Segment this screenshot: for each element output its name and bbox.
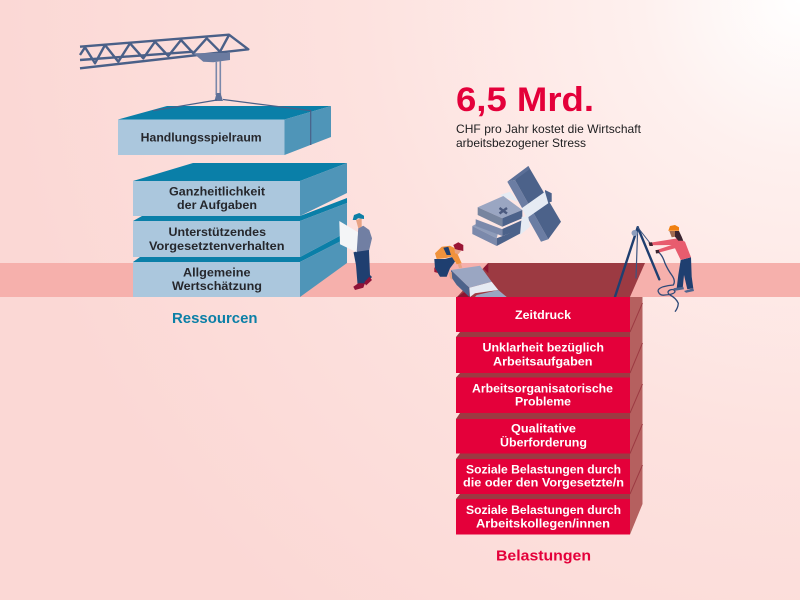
crane xyxy=(80,35,248,101)
block: Handlungsspielraum xyxy=(118,100,331,155)
row: Arbeitsorganisatorische Probleme: Probleme xyxy=(515,395,571,409)
block: Ganzheitlichkeit der Aufgaben: Ganzheitlichkeit xyxy=(169,185,265,199)
row: Unklarheit xyxy=(456,337,630,373)
ground band xyxy=(0,263,800,297)
row: Qualitative Ueberforderung: Überforderung xyxy=(500,436,587,450)
slab being lowered into pit xyxy=(451,266,507,297)
row: Soziale Belastungen Vorgesetzte: die oder den Vorgesetzte/n xyxy=(463,476,624,490)
block: Unterstuetzendes Vorgesetztenverhalten xyxy=(133,198,347,257)
block: Handlungsspielraum: Handlungsspielraum xyxy=(141,131,262,145)
surveyor worker xyxy=(648,225,694,293)
row: Zeitdruck: Zeitdruck xyxy=(515,308,571,322)
block: Allgemeine Wertschaetzung: Wertschätzung xyxy=(172,279,262,293)
subheading: arbeitsbezogener Stress xyxy=(456,136,586,150)
block: Unterstuetzendes Vorgesetztenverhalten: Unterstützendes xyxy=(168,225,266,239)
row: Soziale Belastungen Vorgesetzte xyxy=(456,459,630,494)
block: Unterstuetzendes Vorgesetztenverhalten: Vorgesetztenverhalten xyxy=(149,239,284,253)
block: Allgemeine Wertschaetzung xyxy=(133,232,347,297)
subheading: CHF pro Jahr kostet die Wirtschaft xyxy=(456,122,642,136)
crane trolley xyxy=(193,53,230,62)
block: Ganzheitlichkeit der Aufgaben: der Aufgaben xyxy=(177,198,257,212)
headline number: 6,5 Mrd. xyxy=(456,81,594,119)
row: Soziale Belastungen Arbeitskollegen: Soziale Belastungen durch xyxy=(466,503,621,517)
row: Arbeitsorganisatorische Probleme: Arbeitsorganisatorische xyxy=(472,382,613,396)
row: Qualitative Ueberforderung xyxy=(456,419,630,454)
side face xyxy=(630,297,642,534)
worker with plan xyxy=(339,213,372,290)
tripod xyxy=(615,227,659,297)
row: Unklarheit: Arbeitsaufgaben xyxy=(493,355,592,369)
label: Ressourcen: Ressourcen xyxy=(172,311,258,327)
label: Belastungen: Belastungen xyxy=(496,549,591,565)
crouching worker xyxy=(434,242,463,280)
row: Qualitative Ueberforderung: Qualitative xyxy=(511,422,576,436)
row: Arbeitsorganisatorische Probleme xyxy=(456,378,630,413)
row: Soziale Belastungen Arbeitskollegen: Arbeitskollegen/innen xyxy=(476,517,610,531)
gaps xyxy=(456,332,630,499)
row: Unklarheit: Unklarheit bezüglich xyxy=(482,341,604,355)
pit xyxy=(457,263,645,297)
row: Soziale Belastungen Arbeitskollegen xyxy=(456,499,630,534)
block: Ganzheitlichkeit der Aufgaben xyxy=(133,163,347,216)
falling slabs xyxy=(472,166,561,246)
cable xyxy=(658,252,678,312)
subheading xyxy=(456,122,642,150)
stack: Belastungen xyxy=(456,297,642,534)
block: Allgemeine Wertschaetzung: Allgemeine xyxy=(183,266,251,280)
row: Soziale Belastungen Vorgesetzte: Soziale Belastungen durch xyxy=(466,462,621,476)
row: Zeitdruck xyxy=(456,297,630,332)
